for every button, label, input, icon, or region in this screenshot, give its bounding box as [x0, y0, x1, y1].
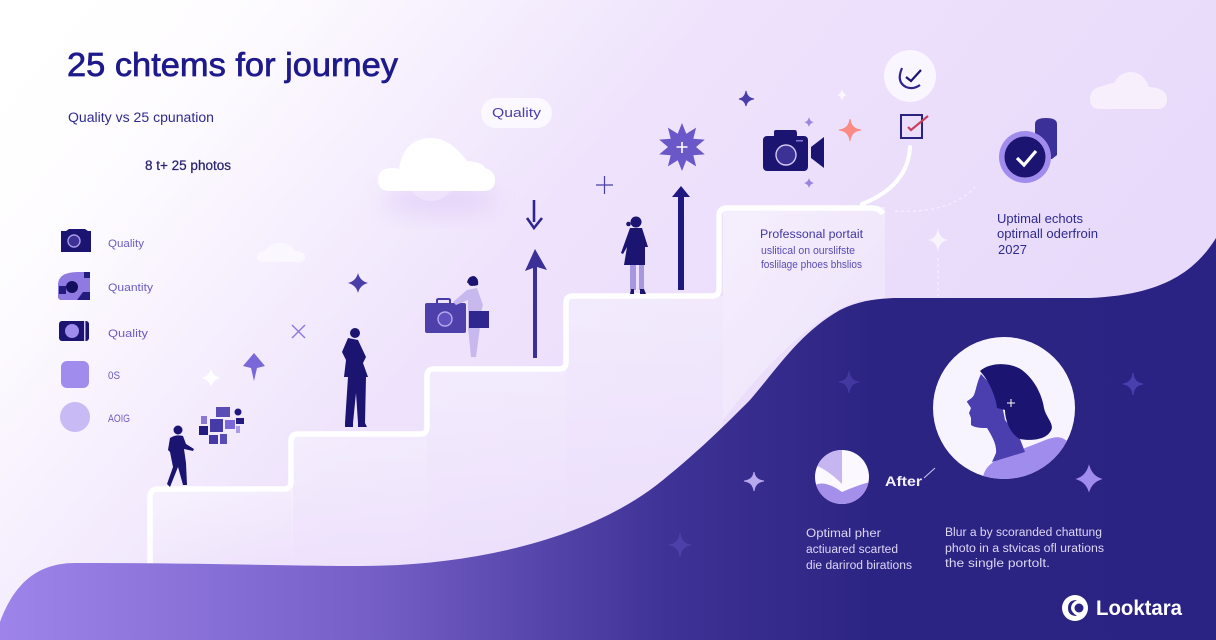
optimal text: Uptimal echots — [997, 212, 1083, 226]
text: optimal: actiuared scarted — [806, 544, 898, 556]
label: quality 2: Quality — [108, 328, 149, 340]
subtitle: Quality vs 25 cpunation — [68, 110, 214, 125]
sparkle: lilac lower — [804, 178, 814, 188]
label: quantity: Quantity — [108, 282, 154, 294]
icon: lens tile — [58, 272, 90, 300]
icon: arrow star — [243, 353, 265, 381]
quality bubble — [481, 98, 552, 128]
after label — [885, 468, 935, 489]
label: quality: Quality — [108, 238, 145, 250]
optimal text: 2027 — [998, 243, 1027, 257]
sparkle: dim left — [839, 371, 859, 393]
step text — [760, 229, 864, 271]
icon: camera lens — [59, 321, 89, 341]
photo cluster — [199, 407, 244, 444]
after label: After — [885, 473, 923, 489]
text: blur: Blur a by scoranded chattung — [945, 527, 1102, 539]
cloud: centre — [378, 138, 498, 214]
icon: check circle — [884, 50, 936, 102]
figure: standing man — [342, 328, 368, 427]
quality bubble: Quality — [492, 105, 542, 120]
small before circle — [815, 450, 869, 504]
sparkle: pale left — [744, 472, 764, 491]
icon: checkbox — [901, 115, 928, 138]
staircase — [150, 207, 885, 570]
icon: video camera — [763, 130, 824, 171]
logo: Looktara — [1096, 597, 1182, 620]
step text: Professonal portait — [760, 229, 864, 241]
title: 25 chtems for journey — [67, 46, 399, 83]
sparkle: navy plus — [739, 91, 754, 106]
text: optimal: die darirod birations — [806, 560, 912, 572]
text: blur: the single portolt. — [945, 558, 1050, 570]
icon: check badge — [999, 118, 1057, 183]
icon: camera case — [425, 299, 466, 333]
sparkle: thin plus — [596, 176, 613, 194]
sparkle: white — [202, 369, 220, 387]
step text: uslitical on ourslifste — [761, 245, 855, 257]
portrait — [933, 337, 1075, 490]
icon: camera — [61, 229, 91, 252]
sparkle: coral — [839, 119, 861, 141]
sparkle: lavender — [1077, 466, 1101, 491]
step text: foslilage phoes bhslios — [761, 259, 862, 271]
arrow: small down — [527, 200, 542, 228]
sparkle: white right — [927, 228, 949, 252]
sparkle: diamond — [348, 273, 368, 293]
arrow: up right — [672, 186, 690, 290]
sparkle: white top — [837, 89, 847, 101]
sparkle: lilac upper — [804, 117, 814, 127]
legend list — [58, 229, 154, 432]
swatch: square — [61, 361, 89, 388]
arrow: up middle — [525, 249, 547, 358]
figure: person with bags — [425, 276, 489, 357]
dotted path — [895, 187, 975, 296]
sparkle: dim bottom — [669, 533, 691, 557]
cloud: small left — [257, 243, 305, 262]
icon: cross mark — [292, 325, 305, 338]
text: optimal: Optimal pher — [806, 528, 881, 540]
label: AOIG: AOIG — [108, 413, 130, 425]
swatch: circle — [60, 402, 90, 432]
sparkle: dim right — [1123, 373, 1143, 395]
logo — [1062, 595, 1182, 621]
figure: woman in dress — [621, 216, 648, 294]
text: blur: photo in a stvicas ofl urations — [945, 543, 1104, 555]
text: optimal — [806, 528, 912, 572]
figure: walking person — [167, 426, 194, 487]
connector curve — [862, 147, 910, 204]
label: 0S: 0S — [108, 370, 120, 382]
optimal text: optirnall oderfroin — [997, 227, 1098, 241]
icon: star badge — [659, 123, 705, 171]
text: blur — [945, 527, 1104, 570]
cloud: top right — [1090, 72, 1167, 109]
wave panel — [0, 238, 1216, 640]
optimal text — [997, 212, 1098, 257]
photo range text: 8 t+ 25 photos — [145, 158, 231, 173]
